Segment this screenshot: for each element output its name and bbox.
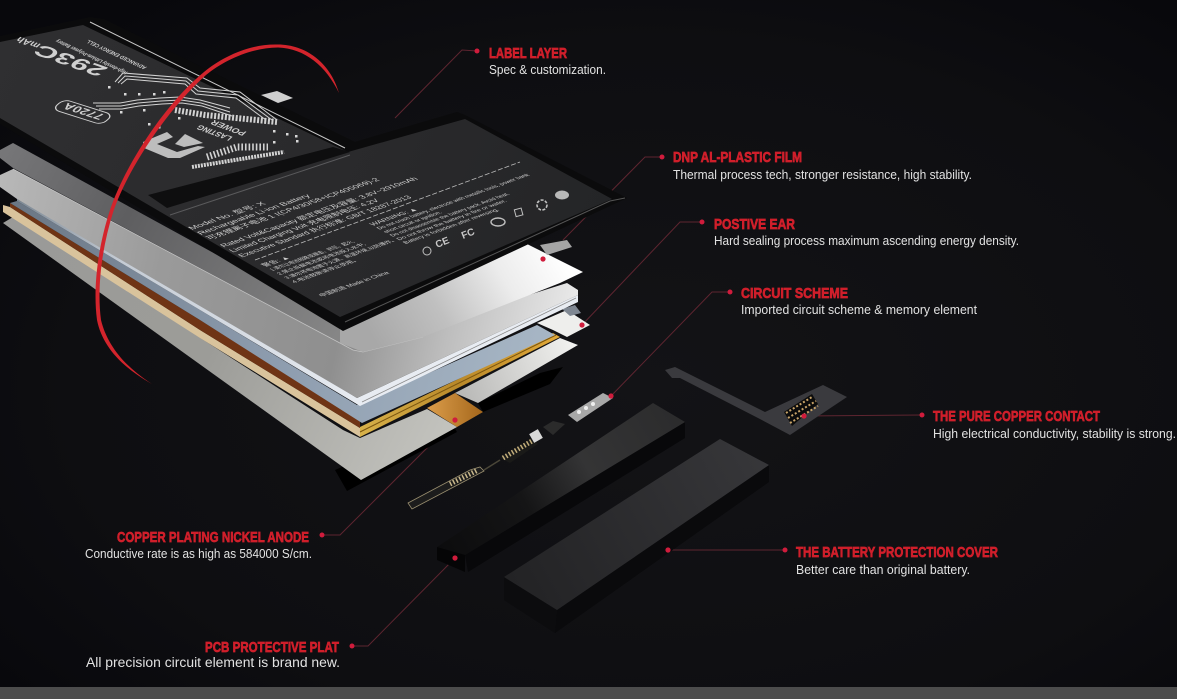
Chinese warning block: 2.禁止拆解电池或将电池投入水中, — [275, 242, 368, 276]
heading: PCB PROTECTIVE PLAT — [205, 640, 339, 656]
description: Imported circuit scheme & memory element — [741, 303, 978, 317]
warning text block: WARNING: ▲ — [367, 206, 420, 227]
callout: protection cover — [796, 545, 998, 577]
certification marks: CE — [434, 235, 451, 251]
heading: THE PURE COPPER CONTACT — [933, 409, 1100, 425]
middle white sheet — [537, 310, 590, 337]
leader lines and label dots — [320, 48, 924, 648]
top face — [0, 25, 612, 317]
sheet one — [0, 143, 363, 352]
brand text: LASTING — [194, 123, 234, 142]
warning text block: short circuit or ignition. — [382, 210, 444, 234]
heading: COPPER PLATING NICKEL ANODE — [117, 530, 309, 546]
callout: label layer — [489, 46, 606, 77]
sheet one edge — [13, 169, 423, 352]
description: All precision circuit element is brand new. — [86, 655, 340, 670]
copper layer — [10, 203, 360, 428]
lower white sheet — [455, 338, 578, 403]
bottom grey strip — [0, 687, 1177, 699]
contact pins — [784, 394, 818, 426]
blue-grey layer — [10, 201, 555, 423]
exploded cell layers — [0, 143, 590, 491]
spec text block: Executive Standard 执行标准: GB/T 18287-2013 — [235, 194, 414, 258]
top face — [437, 403, 685, 555]
top face — [504, 439, 769, 610]
upper connector tab — [261, 91, 293, 103]
white edge band — [17, 199, 578, 406]
heading: CIRCUIT SCHEME — [741, 286, 848, 302]
protection cover rear block — [504, 439, 769, 633]
Chinese warning block: 3.请勿将电池置于火源、高温环境,以防爆炸。 — [282, 237, 400, 280]
shadow block behind stack — [478, 367, 563, 412]
callout: positive ear — [714, 217, 1019, 248]
shadow under bottom sheet — [335, 420, 457, 491]
sheet two — [0, 169, 578, 398]
copper tab — [427, 393, 483, 427]
capacity text: 293CmAh — [7, 33, 112, 79]
description: Hard sealing process maximum ascending energy density. — [714, 234, 1019, 248]
description: High electrical conductivity, stability is strong. — [933, 427, 1176, 441]
warning text block: Do not disassemble the battery pack. Avoid heat. — [388, 192, 512, 238]
spec text block: Model No. 型号: X — [186, 200, 269, 231]
bottom grey sheet — [3, 217, 457, 480]
spec text block: Rechargeable Li-ion Battery — [195, 193, 314, 236]
callout: copper contact — [933, 409, 1176, 441]
certification marks: FC — [460, 227, 476, 242]
brand text 2: POWER — [208, 118, 248, 137]
top foil sheet — [340, 243, 583, 352]
callout: PCB plate — [86, 640, 340, 670]
warning text block: Battery is forbidden after reversing. — [402, 208, 502, 245]
made in china: 中国制造 Made in China — [316, 270, 392, 298]
gold strip — [360, 333, 560, 437]
end face — [437, 547, 465, 572]
red arc — [96, 44, 339, 384]
description: Spec & customization. — [489, 63, 606, 77]
small grey tab on stack — [562, 305, 581, 316]
warning text block: Do not crush battery, electrode with metallic tools, power bank — [375, 173, 532, 231]
small upside-down label text: High-density Lithium-Polymer Battery — [54, 38, 129, 75]
Chinese warning block — [259, 225, 407, 284]
black connector — [543, 421, 565, 435]
spec text block: Rated Volt&Capacity 额定电压及容量: 3.8V~2910mAh — [217, 176, 420, 248]
callout: copper plating — [85, 530, 312, 561]
dashed divider — [255, 162, 520, 260]
side face — [465, 422, 685, 572]
description: Thermal process tech, stronger resistance, high stability. — [673, 168, 972, 182]
battery body with label — [0, 17, 627, 331]
callout: DNP film — [673, 150, 972, 182]
Chinese warning block: 4.电池鼓胀请停止使用。 — [289, 257, 362, 284]
protection cover front block — [437, 403, 685, 572]
certification marks — [423, 190, 569, 255]
positive ear tab — [540, 240, 572, 255]
right panel edge — [170, 155, 350, 215]
end face — [504, 577, 557, 633]
silver plate — [568, 393, 613, 422]
warning text block: Do not throw the battery in fire or water. — [395, 199, 509, 241]
side face — [555, 465, 769, 633]
circuit dots — [108, 86, 298, 144]
description: Better care than original battery. — [796, 563, 970, 577]
spec text block — [186, 158, 438, 258]
heading: THE BATTERY PROTECTION COVER — [796, 545, 998, 561]
copper contact bracket — [665, 367, 847, 435]
anchor dots on parts — [452, 256, 807, 561]
spec text block: Limited Charging Volt 充电限制电压: 4.2V — [226, 197, 382, 253]
spec text block: 可充锂离子电池 1 I(CP4/30/58+ICP405069)-2 — [203, 176, 382, 241]
body outer edge — [0, 17, 627, 331]
chip — [529, 429, 543, 443]
heading: LABEL LAYER — [489, 46, 567, 62]
gloss highlights — [90, 22, 345, 148]
heading: DNP AL-PLASTIC FILM — [673, 150, 802, 166]
heading: POSTIVE EAR — [714, 217, 795, 233]
circuit scheme board — [408, 393, 613, 509]
cream layer — [3, 205, 360, 437]
description: Conductive rate is as high as 584000 S/cm. — [85, 547, 312, 561]
Chinese warning block: 警告: ▲ — [259, 255, 292, 268]
small upside-down label text 2: ADVANCED ENERGY CELL — [85, 38, 148, 70]
Chinese warning block: 1.请勿让电池短路或撞击、挤压、起火, — [267, 239, 357, 272]
model badge — [52, 99, 113, 125]
callout: circuit scheme — [741, 286, 978, 317]
inner dark band — [148, 147, 350, 208]
model badge: 7720A — [60, 101, 107, 122]
logo — [143, 132, 205, 158]
circuit pattern — [93, 73, 284, 167]
